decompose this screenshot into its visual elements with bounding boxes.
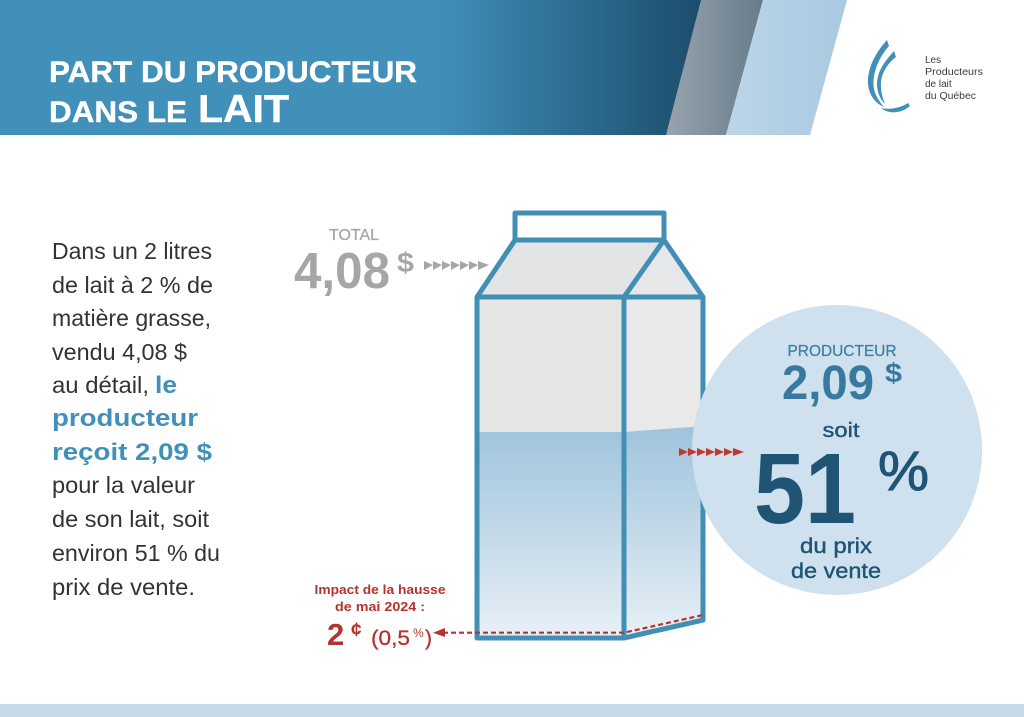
- body text block: vendu 4,08 $: [52, 339, 187, 365]
- title: PART DU PRODUCTEUR: [49, 56, 417, 89]
- producer circle: soit: [822, 420, 860, 442]
- body text block: le: [155, 372, 177, 399]
- impact callout: 2: [327, 617, 344, 652]
- producer circle: %: [878, 439, 929, 502]
- milk carton: [477, 213, 703, 638]
- producer circle: du prix: [800, 535, 873, 558]
- producer circle: de vente: [791, 560, 881, 583]
- total label: [294, 227, 414, 299]
- impact callout: ¢: [351, 620, 362, 641]
- title: LAIT: [198, 88, 289, 131]
- total label: 4,08: [294, 242, 390, 299]
- producer circle: $: [885, 358, 902, 388]
- arrow: milk to circle: [679, 448, 744, 456]
- logo: Les Producteurs de lait du Québec: Les: [925, 55, 941, 66]
- total label: TOTAL: [329, 227, 379, 244]
- body text block: producteur: [52, 405, 199, 432]
- logo: Les Producteurs de lait du Québec: [868, 40, 983, 112]
- header banner: [0, 0, 847, 135]
- body text block: Dans un 2 litres: [52, 238, 212, 264]
- producer circle: [692, 305, 982, 595]
- total label: $: [397, 247, 414, 278]
- body text block: environ 51 % du: [52, 540, 220, 566]
- body text block: prix de vente.: [52, 574, 195, 600]
- producer circle: 2,09: [782, 357, 874, 410]
- impact dashed line: [443, 615, 703, 633]
- body text block: matière grasse,: [52, 305, 211, 331]
- body text block: [52, 238, 220, 600]
- impact callout: [314, 582, 446, 652]
- body text block: pour la valeur: [52, 472, 195, 498]
- producer circle: 51: [754, 433, 856, 545]
- impact callout: %: [413, 626, 424, 640]
- impact callout: ): [425, 627, 432, 650]
- impact callout: de mai 2024 :: [335, 599, 425, 614]
- body text block: au détail,: [52, 372, 149, 398]
- body text block: reçoit 2,09 $: [52, 439, 212, 466]
- logo: Les Producteurs de lait du Québec: du Québec: [925, 91, 976, 102]
- body text block: de lait à 2 % de: [52, 272, 213, 298]
- producer circle: PRODUCTEUR: [788, 343, 896, 360]
- title: DANS LE: [49, 96, 187, 129]
- logo: Les Producteurs de lait du Québec: de lait: [925, 79, 952, 90]
- impact callout: Impact de la hausse: [314, 582, 446, 597]
- arrow: total to carton: [424, 261, 489, 270]
- footer band: [0, 704, 1024, 717]
- body text block: de son lait, soit: [52, 506, 210, 532]
- title: [49, 56, 417, 131]
- logo: Les Producteurs de lait du Québec: Producteurs: [925, 67, 983, 78]
- milk level: [477, 426, 703, 638]
- impact callout: (0,5: [371, 627, 410, 650]
